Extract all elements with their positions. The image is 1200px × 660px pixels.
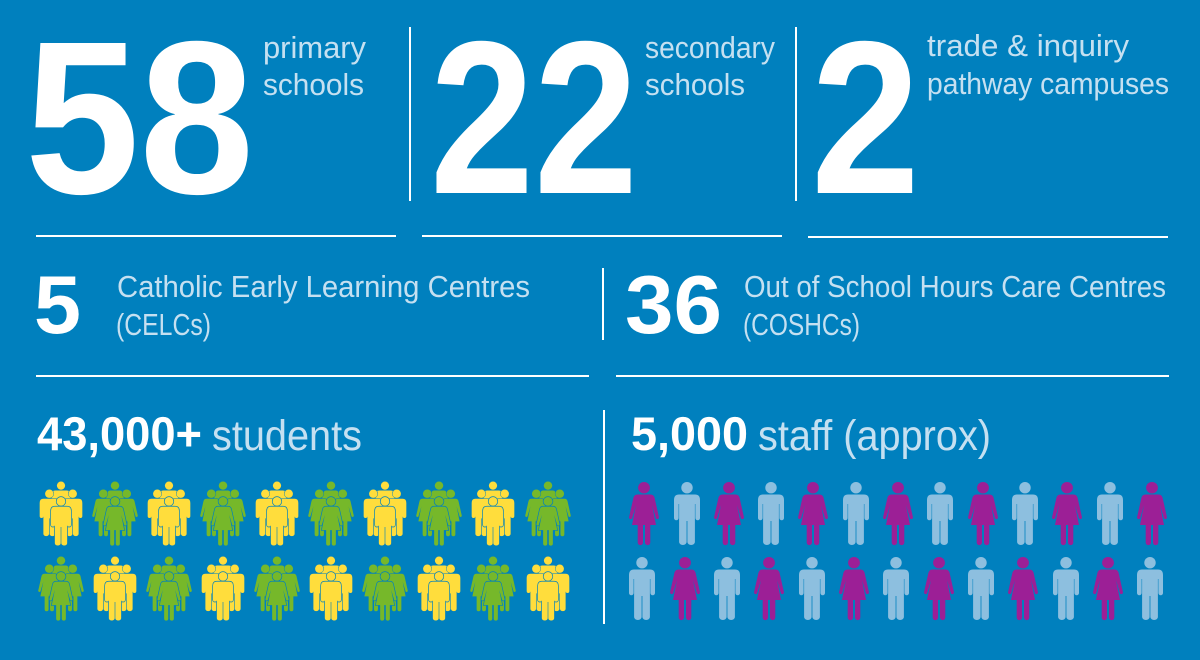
- stat: 36 Out of School Hours Care Centres: [625, 258, 1166, 351]
- stat: 58 primary schools: schools: [263, 67, 364, 102]
- stat: 2 trade and inquiry pathway campuses: [811, 0, 1169, 240]
- stat: 5 Catholic Early Learning Centres: Catholic Early Learning Centres: [117, 269, 530, 304]
- stat: 2 trade and inquiry pathway campuses: 2: [811, 0, 920, 240]
- pictogram: students row 2: [38, 556, 569, 621]
- stat: 22 secondary schools: secondary: [645, 30, 775, 65]
- heading: 43,000+ students: 43,000+: [37, 407, 202, 460]
- stat: 36 Out of School Hours Care Centres: (COSHCs): [743, 307, 860, 342]
- stat: 22 secondary schools: schools: [645, 67, 745, 102]
- stat: 5 Catholic Early Learning Centres: (CELCs): [116, 307, 211, 342]
- stat: 2 trade and inquiry pathway campuses: pathway campuses: [927, 66, 1169, 101]
- stat: 36 Out of School Hours Care Centres: 36: [625, 258, 722, 351]
- pictogram: students row 1: [40, 482, 571, 546]
- stat: 58 primary schools: primary: [263, 30, 366, 65]
- stat: 2 trade and inquiry pathway campuses: trade & inquiry: [927, 28, 1129, 63]
- heading: 5,000 staff (approx): staff (approx): [758, 412, 991, 460]
- heading: 43,000+ students: [37, 407, 362, 460]
- pictogram: staff row 1: [629, 482, 1167, 545]
- heading: 5,000 staff (approx): [631, 407, 991, 460]
- stat: 22 secondary schools: 22: [430, 0, 638, 240]
- pictogram: staff row 2: [629, 557, 1163, 620]
- stat: 5 Catholic Early Learning Centres: [34, 258, 530, 351]
- heading: 5,000 staff (approx): 5,000: [631, 407, 748, 460]
- heading: 43,000+ students: students: [212, 412, 362, 460]
- stat: 5 Catholic Early Learning Centres: 5: [34, 258, 81, 351]
- stat: 58 primary schools: 58: [25, 0, 254, 240]
